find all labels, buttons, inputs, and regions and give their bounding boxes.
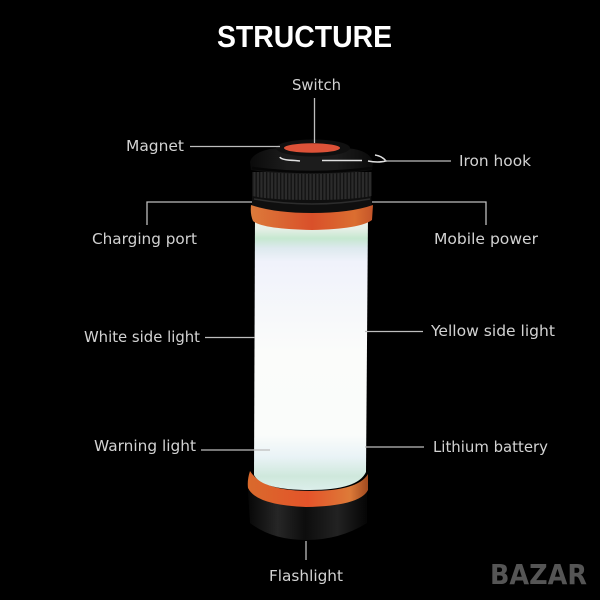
label: Charging port: Charging port (92, 230, 197, 248)
label: Flashlight: Flashlight (269, 567, 343, 585)
flashlight bottom black cap (248, 490, 367, 540)
top orange ring (251, 205, 373, 230)
label: White side light: White side light (84, 328, 200, 346)
label: Magnet: Magnet (126, 137, 184, 155)
watermark: BAZAR (490, 558, 587, 591)
switch button (284, 143, 340, 153)
bottom orange ring (248, 471, 368, 507)
title: STRUCTURE (217, 19, 392, 54)
flashlight device (248, 140, 386, 540)
collar highlight (254, 199, 370, 204)
label: Iron hook: Iron hook (459, 152, 531, 170)
label: Mobile power: Mobile power (434, 230, 539, 248)
light tube (254, 215, 368, 490)
label: Warning light: Warning light (94, 437, 196, 455)
leader lines (147, 98, 486, 560)
label: Lithium battery: Lithium battery (433, 438, 548, 456)
head gap line (252, 168, 372, 172)
label: Yellow side light: Yellow side light (430, 322, 555, 340)
head lower collar (252, 196, 372, 218)
head top cap (250, 146, 373, 174)
label: Switch: Switch (292, 76, 341, 94)
switch hump (276, 140, 350, 156)
knurled grip (252, 172, 372, 200)
iron hook (280, 155, 386, 162)
